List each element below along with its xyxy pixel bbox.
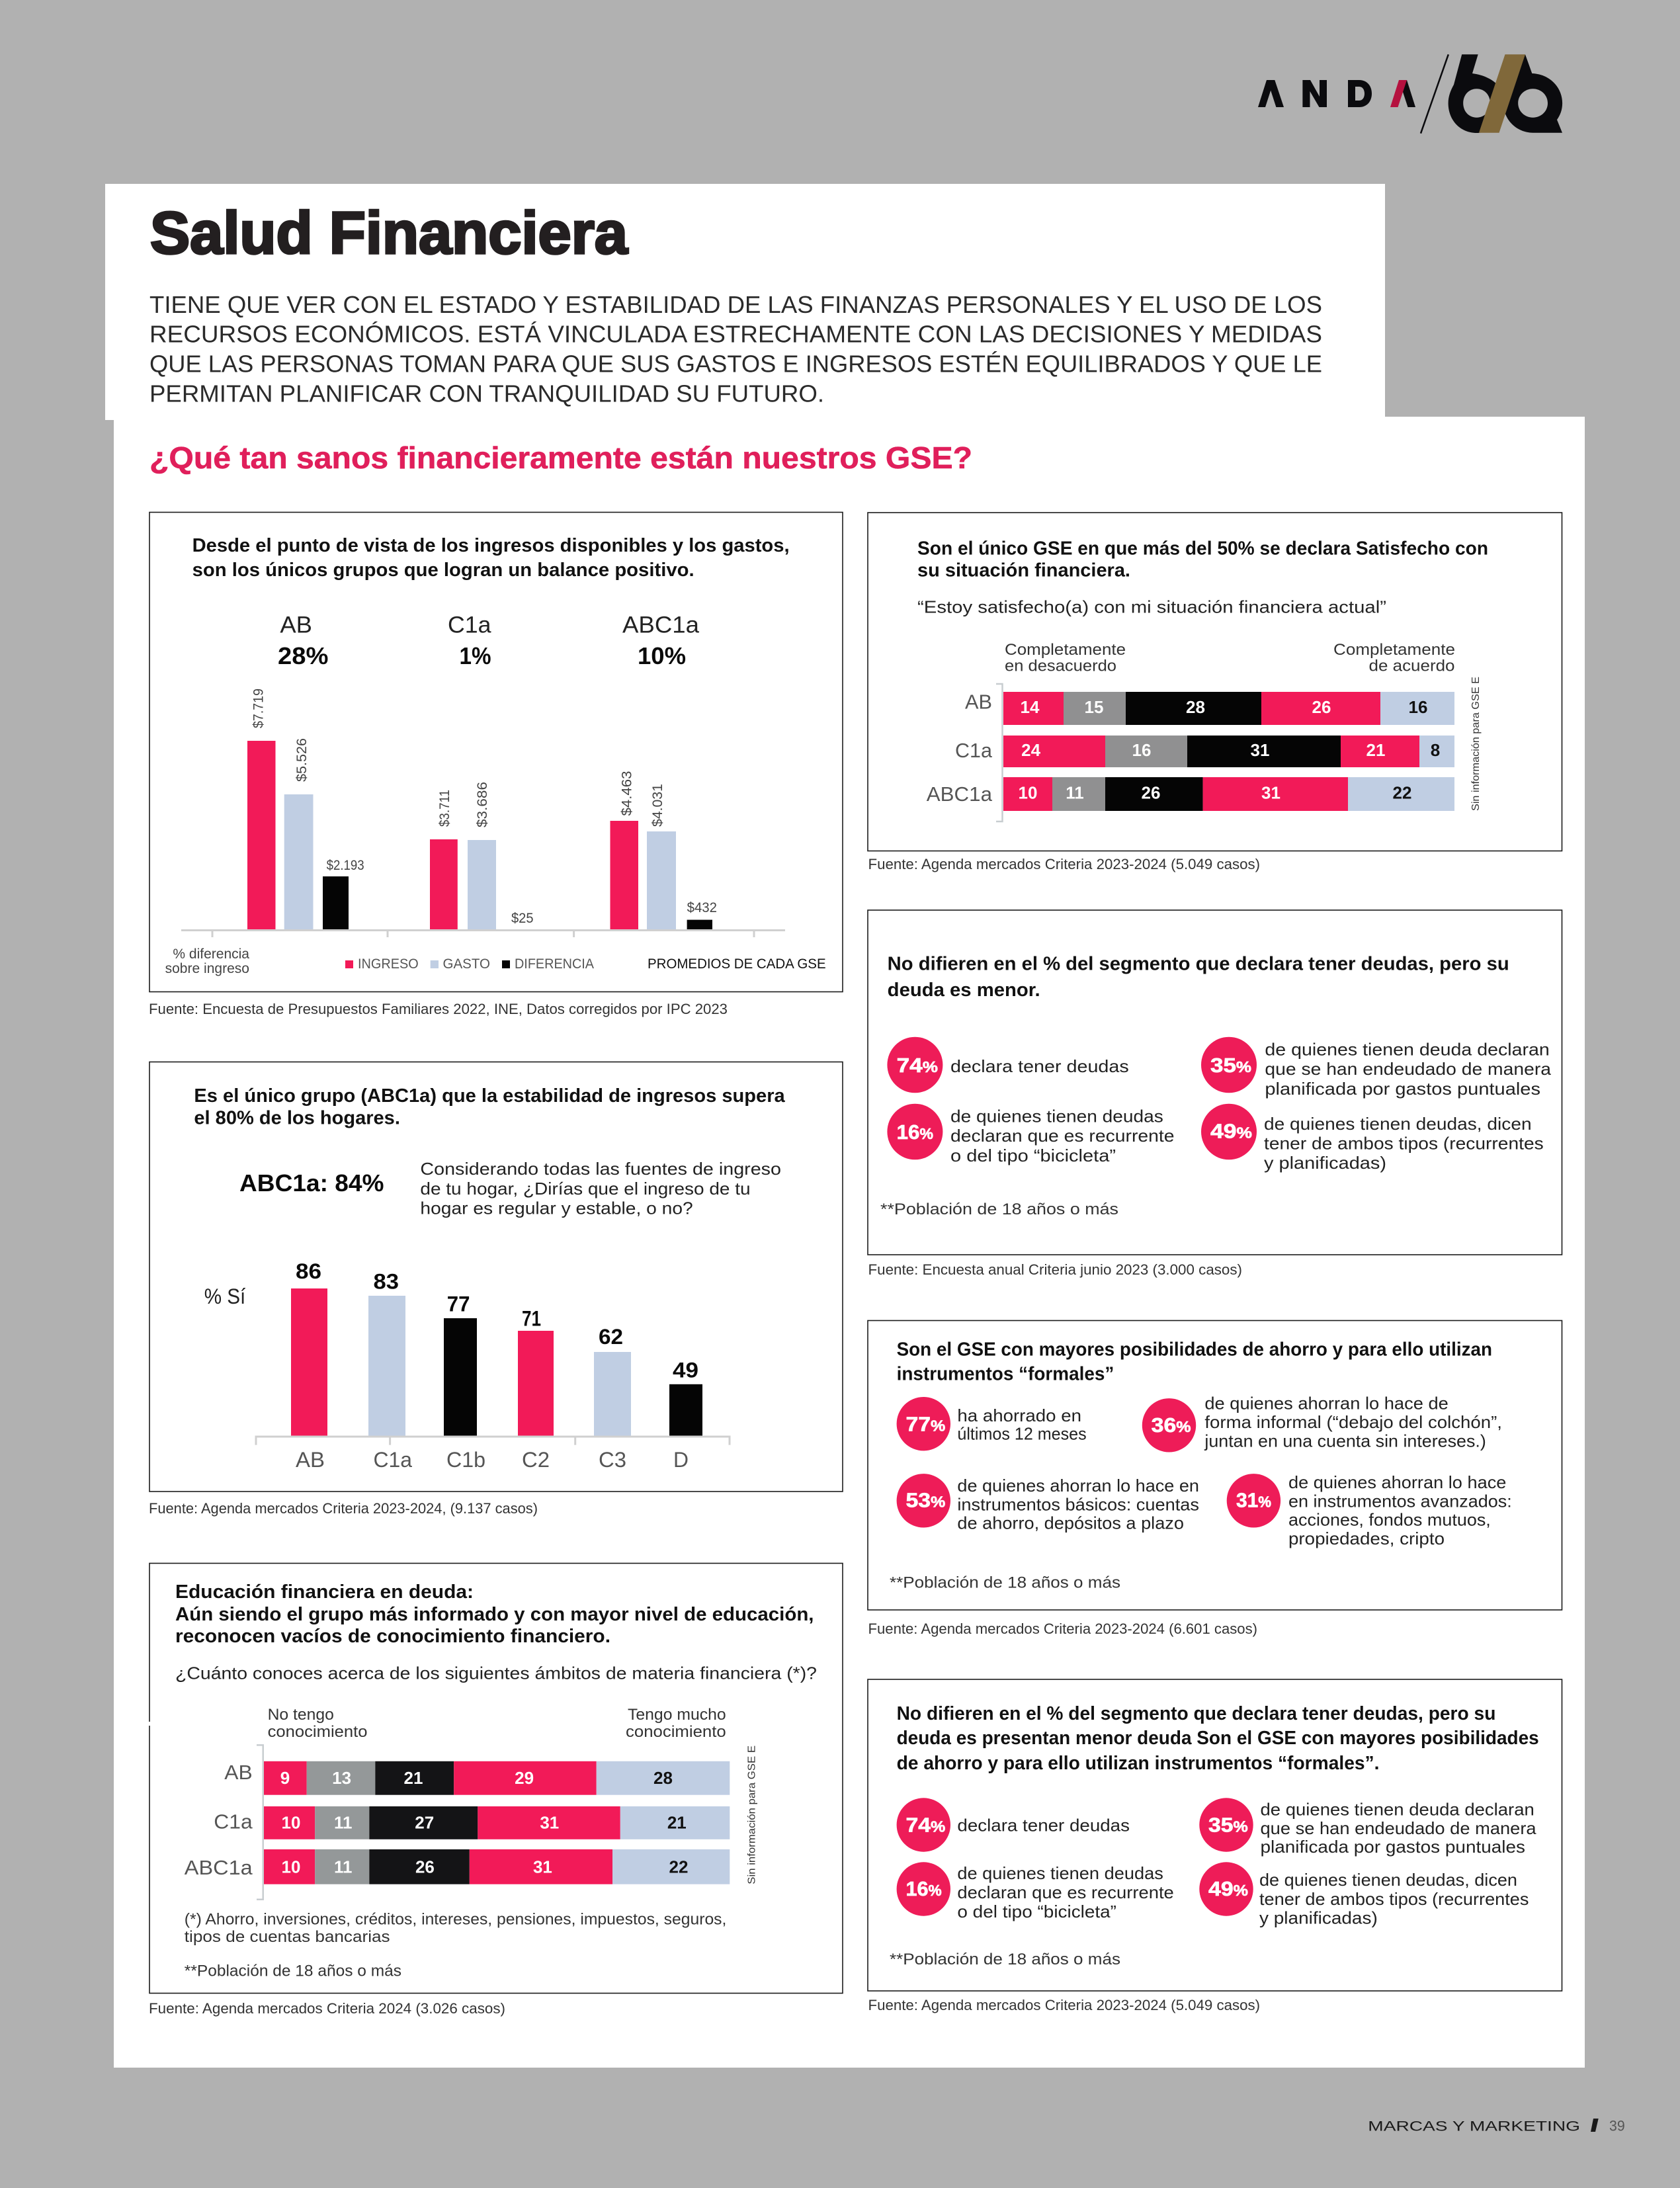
intro text (149, 291, 1322, 407)
bar chart: 71 (522, 1307, 541, 1331)
scale labels: Completamente (1005, 641, 1126, 659)
scale labels (1005, 641, 1455, 675)
stacked bar chart: 21 (1366, 740, 1385, 760)
stat: 53% (897, 1474, 1199, 1533)
panel heading: Aún siendo el grupo más informado y con mayor nivel de educación, (175, 1604, 814, 1625)
bar chart: $3.711 (437, 790, 452, 827)
stat: 35%: que se han endeudado de manera (1265, 1059, 1552, 1079)
stacked bar chart (185, 1745, 730, 1900)
panel heading: No difieren en el % del segmento que declara tener deudas, pero su (888, 954, 1509, 975)
question: ¿Cuánto conoces acerca de los siguientes ámbitos de materia financiera (*)? (175, 1663, 817, 1683)
source note: Fuente: Agenda mercados Criteria 2023-2024 (5.049 casos) (868, 1997, 1260, 2013)
panel: satisfaccion financiera (868, 513, 1562, 851)
question: de tu hogar, ¿Dirías que el ingreso de tu (420, 1179, 751, 1199)
stat: 16%: declaran que es recurrente (957, 1882, 1174, 1902)
stat: 53%: de ahorro, depósitos a plazo (957, 1513, 1184, 1533)
stat: 74% (887, 1037, 1129, 1093)
intro text: RECURSOS ECONÓMICOS. ESTÁ VINCULADA ESTRECHAMENTE CON LAS DECISIONES Y MEDIDAS (149, 320, 1322, 348)
bar chart: 49 (673, 1359, 698, 1382)
stat: 49%: de quienes tienen deudas, dicen (1259, 1870, 1517, 1890)
panel heading (192, 535, 790, 581)
stacked bar chart: 24 (1021, 740, 1041, 760)
title: Salud Financiera (150, 200, 628, 267)
group labels (280, 612, 700, 638)
page footer: 39 (1609, 2118, 1625, 2134)
panel heading: Es el único grupo (ABC1a) que la estabilidad de ingresos supera (194, 1085, 786, 1107)
axis note: sobre ingreso (165, 961, 249, 976)
stacked bar chart: 14 (1021, 697, 1040, 717)
bar chart: C2 (522, 1448, 550, 1472)
stat: 49%: tener de ambos tipos (recurrentes (1259, 1889, 1529, 1909)
stat: 35% (1201, 1037, 1552, 1099)
question (420, 1159, 781, 1218)
stat: 49% (1201, 1104, 1544, 1173)
scale labels: Completamente (1333, 641, 1455, 659)
stacked bar chart: 9 (280, 1768, 290, 1788)
bar chart: C1a (373, 1448, 412, 1472)
panel: ahorro (868, 1320, 1562, 1610)
scale labels: de acuerdo (1369, 657, 1455, 675)
group percentages: 10% (638, 642, 686, 669)
logo: ANDA 60 (1258, 54, 1562, 134)
stacked bar chart: AB (224, 1761, 253, 1784)
header panel (105, 184, 1385, 420)
stat: 74%: 74% (897, 1054, 938, 1077)
stacked bar chart: C1a (955, 739, 993, 762)
stat: 49%: y planificadas) (1259, 1908, 1378, 1927)
bar chart: $3.686 (475, 782, 490, 827)
panel: ingresos y gastos (149, 512, 843, 992)
stacked bar chart: 31 (533, 1857, 552, 1876)
scale labels: conocimiento (268, 1723, 368, 1741)
group labels: AB (280, 612, 312, 638)
stacked bar chart: ABC1a (927, 782, 993, 806)
stat: 16%: o del tipo “bicicleta” (957, 1902, 1116, 1921)
panel heading: su situación financiera. (917, 560, 1130, 581)
stat: 77%: 77% (906, 1412, 945, 1435)
bar chart: $4.463 (619, 771, 635, 816)
panel heading: son los únicos grupos que logran un balance positivo. (192, 560, 694, 581)
intro text: TIENE QUE VER CON EL ESTADO Y ESTABILIDAD DE LAS FINANZAS PERSONALES Y EL USO DE LOS (149, 291, 1322, 318)
panel: deudas y ahorro (868, 1679, 1562, 1991)
stat: 31%: propiedades, cripto (1288, 1529, 1445, 1548)
stacked bar chart: 22 (669, 1857, 688, 1876)
panel heading (897, 1703, 1539, 1774)
footnotes (185, 1910, 726, 1980)
stat: 16% (897, 1862, 1174, 1921)
panel heading (175, 1581, 814, 1647)
footnote: **Población de 18 años o más (890, 1951, 1120, 1968)
question: hogar es regular y estable, o no? (420, 1199, 693, 1218)
axis note: % diferencia (173, 947, 249, 962)
stat: 16%: 16% (906, 1877, 942, 1900)
stacked bar chart: 21 (667, 1813, 687, 1833)
group percentages (278, 642, 686, 669)
panel heading: Son el único GSE en que más del 50% se declara Satisfecho con (917, 538, 1488, 560)
question: “Estoy satisfecho(a) con mi situación financiera actual” (917, 597, 1386, 616)
source note: Fuente: Agenda mercados Criteria 2023-2024, (9.137 casos) (149, 1500, 538, 1517)
stat: 35% (1199, 1798, 1536, 1857)
scale labels: en desacuerdo (1005, 657, 1116, 675)
stat: 49% (1199, 1862, 1529, 1927)
stat: 36%: forma informal (“debajo del colchón”, (1204, 1412, 1502, 1432)
source note: Fuente: Agenda mercados Criteria 2023-2024 (6.601 casos) (868, 1620, 1257, 1637)
panel heading: instrumentos “formales” (897, 1364, 1114, 1385)
stat: 36% (1142, 1394, 1502, 1452)
legend: INGRESO (358, 956, 419, 972)
stat: 53%: 53% (906, 1488, 945, 1511)
bar chart: $7.719 (251, 689, 267, 728)
footnote: **Población de 18 años o más (880, 1200, 1118, 1218)
stat: 49%: 49% (1210, 1120, 1252, 1143)
stacked bar chart: 31 (1251, 740, 1269, 760)
stacked bar chart (927, 684, 1454, 821)
page footer (1368, 2118, 1625, 2134)
page footer: MARCAS Y MARKETING (1368, 2119, 1580, 2134)
bar chart: AB (296, 1448, 325, 1472)
panel heading: Son el GSE con mayores posibilidades de ahorro y para ello utilizan (897, 1339, 1492, 1360)
bar chart (181, 689, 785, 937)
stacked bar chart: 16 (1409, 697, 1427, 717)
stat: 35%: planificada por gastos puntuales (1265, 1079, 1540, 1099)
stat: 31% (1227, 1472, 1512, 1548)
panel: deudas (868, 910, 1562, 1255)
bar chart: C3 (599, 1448, 626, 1472)
stat: 31%: acciones, fondos mutuos, (1288, 1510, 1491, 1530)
stat: 16%: de quienes tienen deudas (950, 1107, 1163, 1126)
stat: 35%: 35% (1210, 1054, 1251, 1077)
panel heading: reconocen vacíos de conocimiento financiero. (175, 1626, 610, 1647)
side note: Sin información para GSE E (746, 1746, 758, 1884)
stacked bar chart: 11 (334, 1857, 352, 1876)
stat: 49%: y planificadas) (1264, 1153, 1386, 1173)
bar chart: 86 (296, 1259, 321, 1283)
stat: 77%: últimos 12 meses (957, 1424, 1087, 1444)
stacked bar chart: 26 (1142, 783, 1160, 803)
axis note (165, 947, 249, 976)
stat: 36%: 36% (1152, 1413, 1191, 1437)
scale labels: conocimiento (626, 1723, 726, 1741)
bar chart: $5.526 (294, 738, 310, 782)
section heading: ¿Qué tan sanos financieramente están nuestros GSE? (149, 441, 972, 475)
stacked bar chart: 22 (1393, 783, 1411, 803)
stat: 35%: de quienes tienen deuda declaran (1261, 1799, 1534, 1819)
bar chart: $25 (511, 911, 533, 926)
stat: 53%: instrumentos básicos: cuentas (957, 1494, 1199, 1514)
legend: DIFERENCIA (515, 956, 594, 972)
stat: 35%: 35% (1208, 1814, 1248, 1837)
scale labels: Tengo mucho (628, 1706, 726, 1724)
source note: Fuente: Encuesta de Presupuestos Familiares 2022, INE, Datos corregidos por IPC 2023 (149, 1001, 728, 1017)
panel heading (917, 538, 1488, 581)
stat: 16%: de quienes tienen deudas (957, 1863, 1163, 1883)
stacked bar chart: 15 (1085, 697, 1103, 717)
legend (345, 956, 826, 972)
stat: 77%: ha ahorrado en (957, 1406, 1081, 1425)
group percentages: 1% (459, 642, 491, 669)
stat: 31%: 31% (1236, 1488, 1271, 1511)
stacked bar chart: 21 (404, 1768, 423, 1788)
stat: 53%: de quienes ahorran lo hace en (957, 1476, 1199, 1495)
stacked bar chart: 10 (1019, 783, 1037, 803)
stacked bar chart: 10 (282, 1857, 300, 1876)
stacked bar chart: AB (965, 691, 992, 713)
stat: 74% (897, 1798, 1130, 1852)
stacked bar chart: ABC1a (185, 1856, 253, 1879)
stat: 74%: declara tener deudas (950, 1056, 1129, 1076)
stat: 16% (887, 1104, 1175, 1165)
panel heading: Desde el punto de vista de los ingresos disponibles y los gastos, (192, 535, 790, 556)
panel heading (897, 1339, 1492, 1385)
stacked bar chart: 28 (1186, 697, 1205, 717)
panel heading: de ahorro y para ello utilizan instrumentos “formales”. (897, 1753, 1380, 1774)
scale labels: No tengo (268, 1706, 334, 1724)
panel heading: deuda es menor. (888, 980, 1040, 1001)
panel: educacion financiera (148, 1564, 843, 1994)
question: Considerando todas las fuentes de ingreso (420, 1159, 781, 1179)
panel heading: el 80% de los hogares. (194, 1107, 400, 1128)
scale labels (268, 1706, 726, 1741)
bar chart: 77 (447, 1292, 470, 1316)
stat: 49%: de quienes tienen deudas, dicen (1264, 1114, 1532, 1134)
stat: 74%: 74% (906, 1814, 945, 1837)
stat: 35%: planificada por gastos puntuales (1261, 1837, 1525, 1857)
stat: 35%: que se han endeudado de manera (1261, 1818, 1536, 1838)
bar chart: $432 (687, 900, 717, 915)
stacked bar chart: 26 (1312, 697, 1331, 717)
stacked bar chart: 31 (540, 1813, 559, 1833)
stat: 35%: de quienes tienen deuda declaran (1265, 1040, 1550, 1060)
bar chart (256, 1259, 730, 1472)
panel heading: deuda es presentan menor deuda Son el GSE con mayores posibilidades (897, 1728, 1539, 1749)
bar chart: $4.031 (650, 784, 665, 827)
footnotes: (*) Ahorro, inversiones, créditos, intereses, pensiones, impuestos, seguros, (185, 1910, 726, 1928)
legend: PROMEDIOS DE CADA GSE (648, 956, 826, 972)
footnotes: tipos de cuentas bancarias (185, 1928, 390, 1946)
side note: Sin información para GSE E (1470, 677, 1482, 811)
main white panel (114, 417, 1585, 2068)
source note: Fuente: Encuesta anual Criteria junio 2023 (3.000 casos) (868, 1261, 1242, 1278)
intro text: QUE LAS PERSONAS TOMAN PARA QUE SUS GASTOS E INGRESOS ESTÉN EQUILIBRADOS Y QUE LE (149, 351, 1322, 377)
stat: 16%: o del tipo “bicicleta” (950, 1146, 1116, 1165)
group percentages: 28% (278, 642, 328, 669)
stat: 16%: 16% (897, 1120, 933, 1144)
bar chart: C1b (446, 1448, 485, 1472)
legend: GASTO (443, 956, 490, 972)
stacked bar chart: 16 (1132, 740, 1151, 760)
panel heading (194, 1085, 786, 1128)
stacked bar chart: 27 (415, 1813, 434, 1833)
bar chart: D (673, 1448, 689, 1472)
group labels: ABC1a (622, 612, 700, 638)
stacked bar chart: 11 (1066, 783, 1084, 803)
stat: 36%: juntan en una cuenta sin intereses.) (1204, 1431, 1486, 1451)
stat: 49%: tener de ambos tipos (recurrentes (1264, 1133, 1544, 1153)
stat: 31%: de quienes ahorran lo hace (1288, 1472, 1506, 1492)
footnotes: **Población de 18 años o más (185, 1962, 401, 1980)
axis note: % Sí (204, 1284, 245, 1308)
group labels: C1a (448, 612, 491, 638)
source note: Fuente: Agenda mercados Criteria 2024 (3.026 casos) (149, 2000, 505, 2017)
stacked bar chart: 8 (1431, 740, 1440, 760)
bar chart: 83 (373, 1270, 399, 1294)
stacked bar chart: 11 (334, 1813, 352, 1833)
bar chart: $2.193 (327, 858, 364, 873)
intro text: PERMITAN PLANIFICAR CON TRANQUILIDAD SU FUTURO. (149, 380, 824, 407)
stat: 77% (897, 1397, 1087, 1451)
stacked bar chart: 13 (332, 1768, 351, 1788)
footnote: **Población de 18 años o más (890, 1574, 1120, 1592)
stacked bar chart: 26 (415, 1857, 435, 1876)
panel heading: No difieren en el % del segmento que declara tener deudas, pero su (897, 1703, 1495, 1724)
panel: estabilidad de ingresos (149, 1062, 843, 1492)
stat: 74%: declara tener deudas (957, 1816, 1130, 1835)
bar chart: 62 (599, 1325, 623, 1349)
source note: Fuente: Agenda mercados Criteria 2023-2024 (5.049 casos) (868, 856, 1260, 872)
stat: 16%: declaran que es recurrente (950, 1126, 1175, 1146)
stat: 49%: 49% (1208, 1877, 1248, 1900)
key figure: ABC1a: 84% (239, 1169, 384, 1197)
panel heading (888, 954, 1509, 1001)
stat: 36%: de quienes ahorran lo hace de (1204, 1394, 1449, 1413)
stacked bar chart: 31 (1261, 783, 1281, 803)
stacked bar chart: 10 (282, 1813, 300, 1833)
stat: 31%: en instrumentos avanzados: (1288, 1491, 1512, 1511)
stacked bar chart: C1a (214, 1810, 253, 1833)
panel heading: Educación financiera en deuda: (175, 1581, 474, 1603)
stacked bar chart: 28 (653, 1768, 673, 1788)
stacked bar chart: 29 (515, 1768, 534, 1788)
